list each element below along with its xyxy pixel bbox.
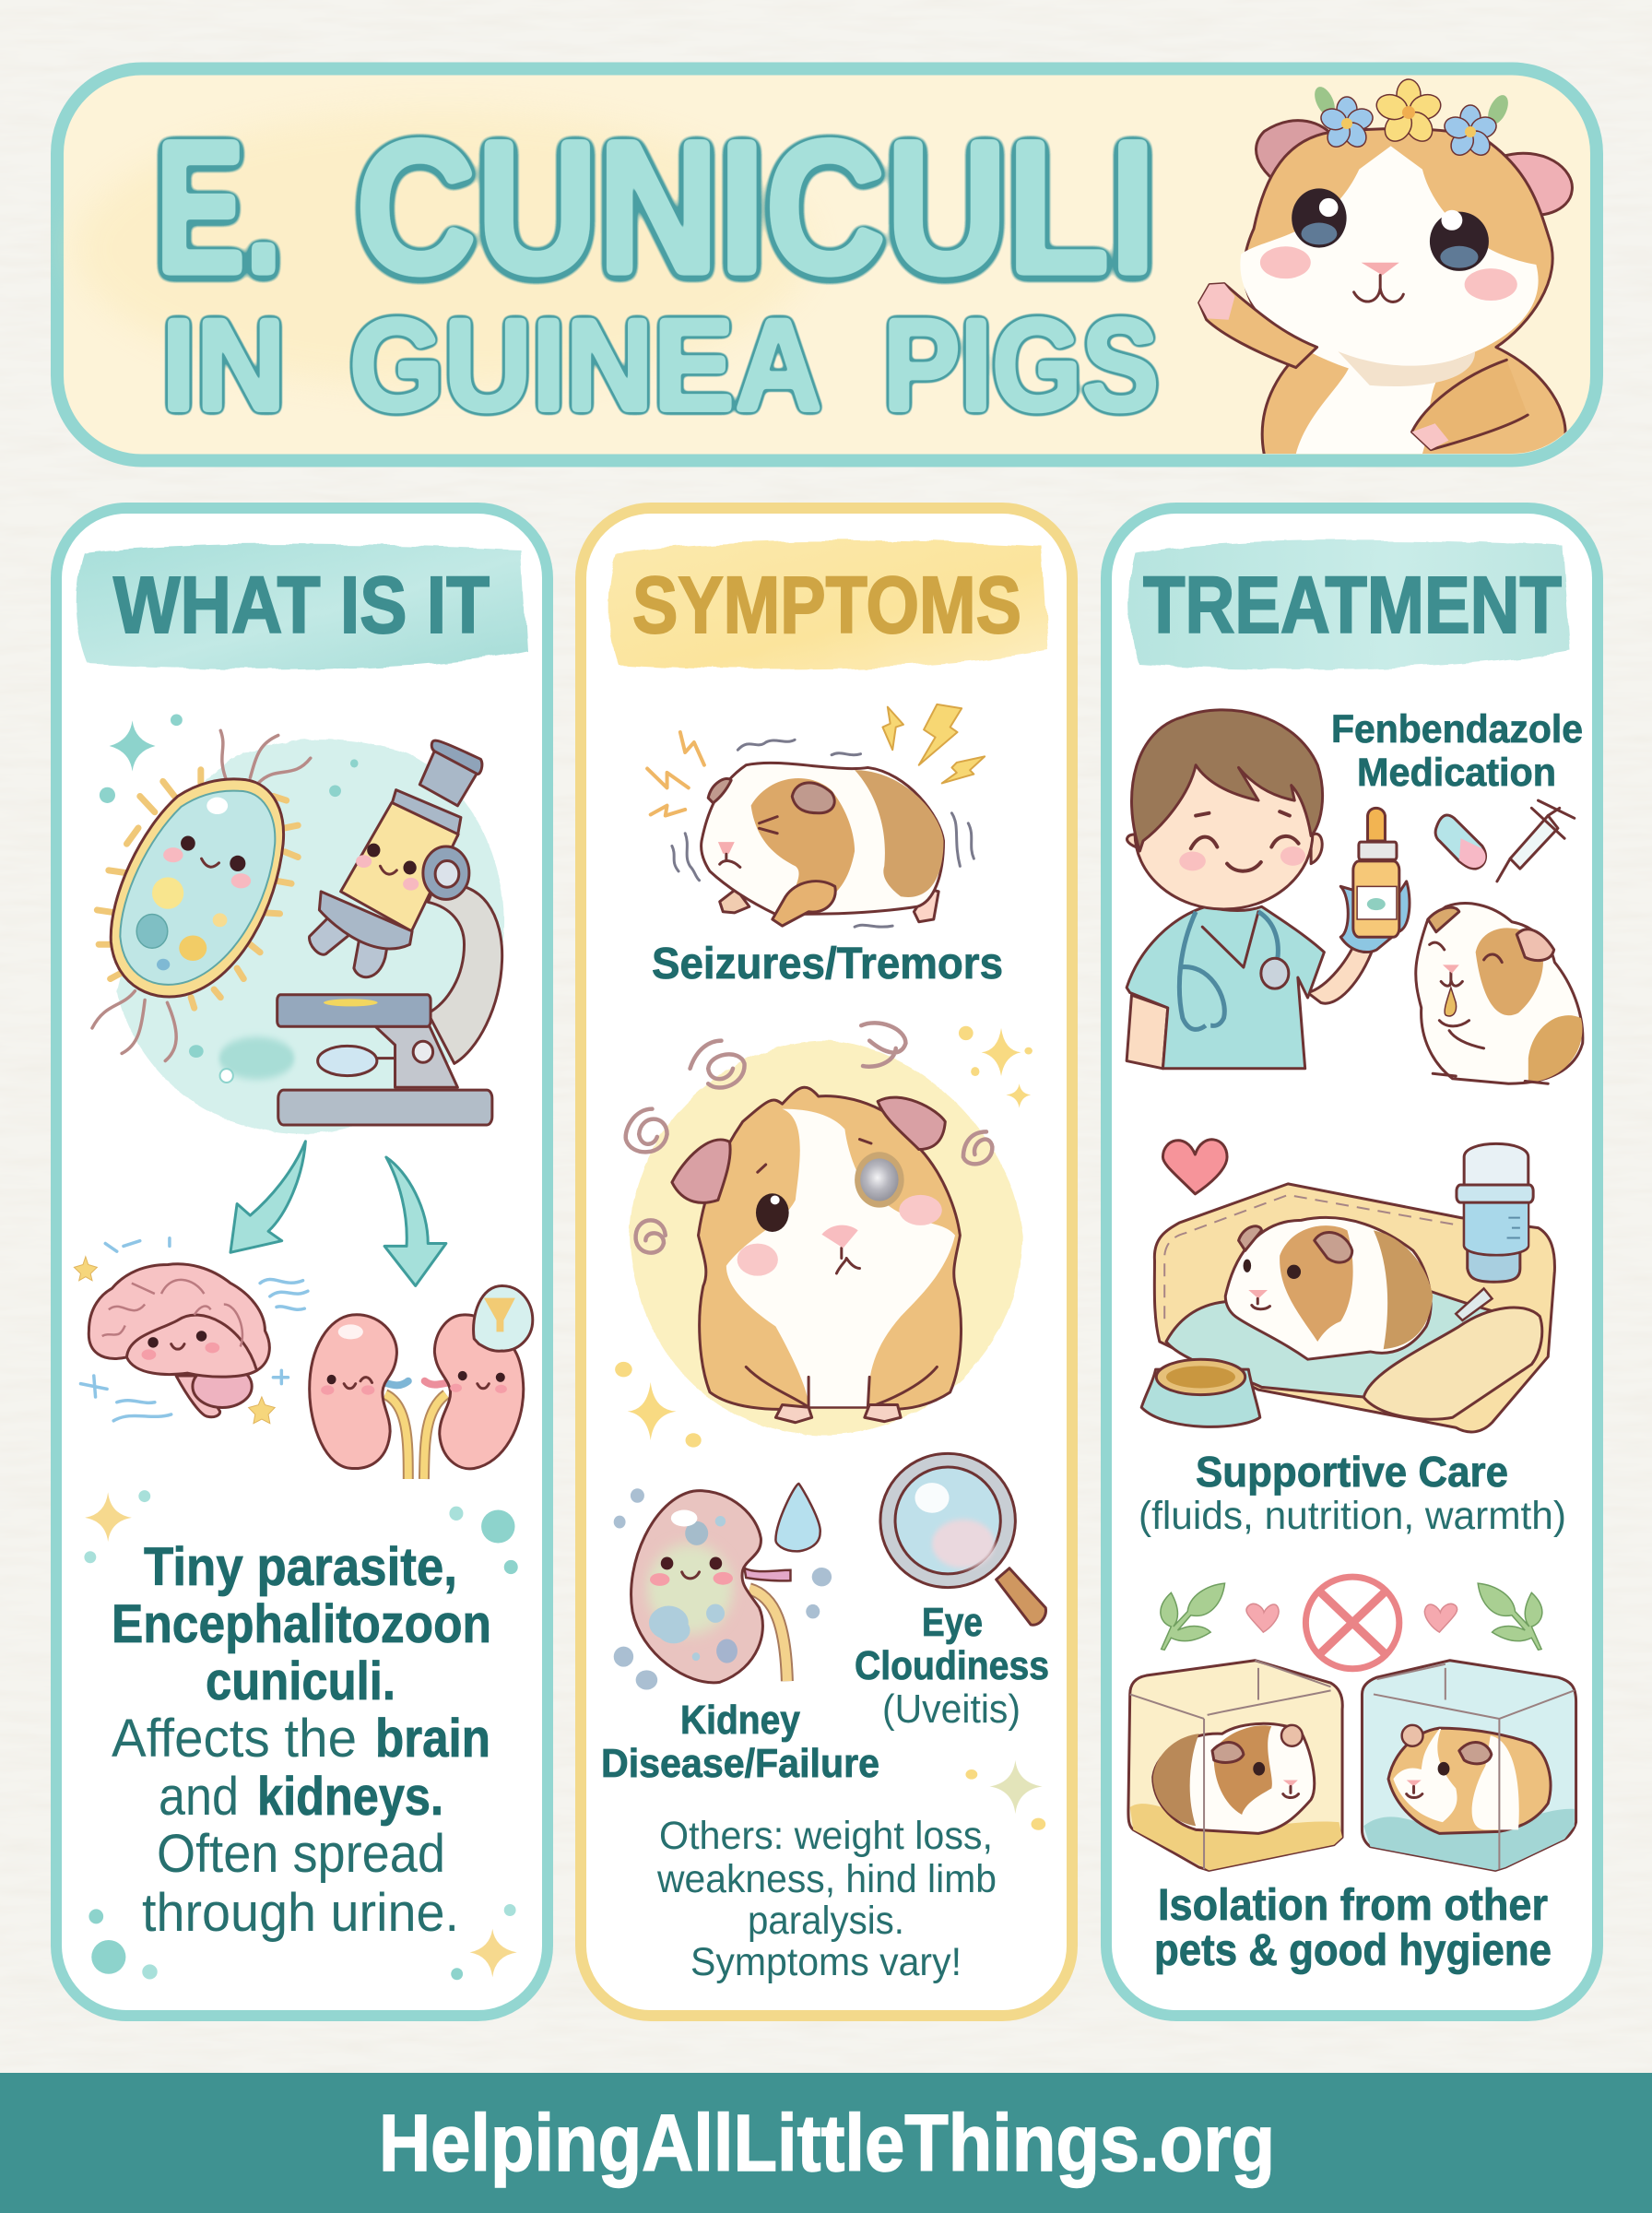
- label: supportive care: (fluids, nutrition, warmth): [1139, 1494, 1566, 1538]
- footer website: HelpingAllLittleThings.org: [379, 2099, 1275, 2188]
- text block: what is it: cuniculi.: [206, 1651, 395, 1711]
- label: supportive care: [1139, 1448, 1566, 1538]
- label: eye cloudiness: Cloudiness: [855, 1643, 1049, 1688]
- icon: brain: [74, 1238, 308, 1424]
- title: E.: [156, 101, 282, 314]
- heading: treatment: TREATMENT: [1143, 561, 1562, 650]
- sparkle: symptoms: [965, 1760, 1045, 1830]
- title: GUINEA: [349, 292, 822, 439]
- icon: pill, syringe and guinea pig taking medicine: [1416, 800, 1583, 1083]
- label: kidney disease: Kidney: [680, 1698, 800, 1743]
- title: CUNICULI: [356, 101, 1156, 314]
- title: [156, 101, 1159, 439]
- arrow: to kidneys: [384, 1157, 446, 1285]
- text block: what is it: Tiny parasite,: [144, 1537, 457, 1597]
- icon: magnifying glass over cloudy eye: [880, 1453, 1045, 1625]
- panel: what is it: [56, 508, 548, 2016]
- label: fenbendazole: Fenbendazole: [1331, 707, 1583, 751]
- label: seizures: Seizures/Tremors: [652, 940, 1003, 988]
- text block: other symptoms: weakness, hind limb: [656, 1857, 997, 1901]
- heading: symptoms: [608, 540, 1048, 669]
- text block: what is it: kidneys.: [257, 1767, 443, 1827]
- text block: what is it: through urine.: [142, 1883, 459, 1943]
- icon: diseased kidney with droplet: [614, 1484, 832, 1690]
- illustration: parasite under microscope: [92, 715, 504, 1134]
- label: isolation: pets & good hygiene: [1154, 1926, 1552, 1975]
- text block: other symptoms: Others: weight loss,: [659, 1814, 993, 1858]
- label: fenbendazole: Medication: [1357, 751, 1556, 795]
- heading: treatment: [1130, 540, 1570, 669]
- title: IN: [161, 292, 286, 439]
- text block: what is it: and: [159, 1767, 239, 1827]
- heading: what is it: WHAT IS IT: [113, 561, 490, 650]
- sparkles: what is it: [84, 1490, 518, 1980]
- text block: what is it: brain: [375, 1709, 490, 1769]
- arrow: to brain: [230, 1142, 305, 1252]
- header banner: [57, 68, 1597, 461]
- text block: what is it: Often spread: [157, 1824, 445, 1884]
- label: kidney disease: [601, 1698, 879, 1786]
- label: kidney disease: Disease/Failure: [601, 1741, 879, 1786]
- icon: guinea pig with seizures: [647, 704, 985, 927]
- panel: treatment: [1106, 508, 1598, 2016]
- icon: isolation cages with no-contact sign: [1128, 1577, 1576, 1870]
- icon: supportive care bed with water bottle and food: [1141, 1140, 1554, 1432]
- heading: what is it: [77, 544, 526, 669]
- label: eye cloudiness: (Uveitis): [882, 1686, 1021, 1732]
- panel: symptoms: [581, 508, 1072, 2016]
- heading: symptoms: SYMPTOMS: [632, 561, 1021, 650]
- label: eye cloudiness: Eye: [922, 1600, 983, 1645]
- label: supportive care: Supportive Care: [1196, 1448, 1508, 1496]
- text block: what is it: Encephalitozoon: [112, 1594, 491, 1654]
- icon: dizzy guinea pig with cloudy eye: [615, 1023, 1032, 1448]
- text block: what is it: Affects the: [112, 1709, 357, 1769]
- text block: other symptoms: [656, 1814, 997, 1984]
- title: PIGS: [883, 292, 1159, 439]
- label: isolation: [1154, 1881, 1552, 1975]
- text block: other symptoms: paralysis.: [748, 1899, 904, 1943]
- label: eye cloudiness: [855, 1600, 1049, 1732]
- label: isolation: Isolation from other: [1158, 1881, 1548, 1930]
- icon: waving guinea pig with flower crown: [1199, 79, 1572, 456]
- text block: other symptoms: Symptoms vary!: [690, 1940, 962, 1984]
- footer: [0, 2073, 1652, 2213]
- label: fenbendazole: [1331, 707, 1583, 795]
- icon: veterinarian with medicine: [1127, 710, 1410, 1069]
- text block: what is it: [112, 1537, 491, 1943]
- icon: kidneys: [310, 1285, 533, 1479]
